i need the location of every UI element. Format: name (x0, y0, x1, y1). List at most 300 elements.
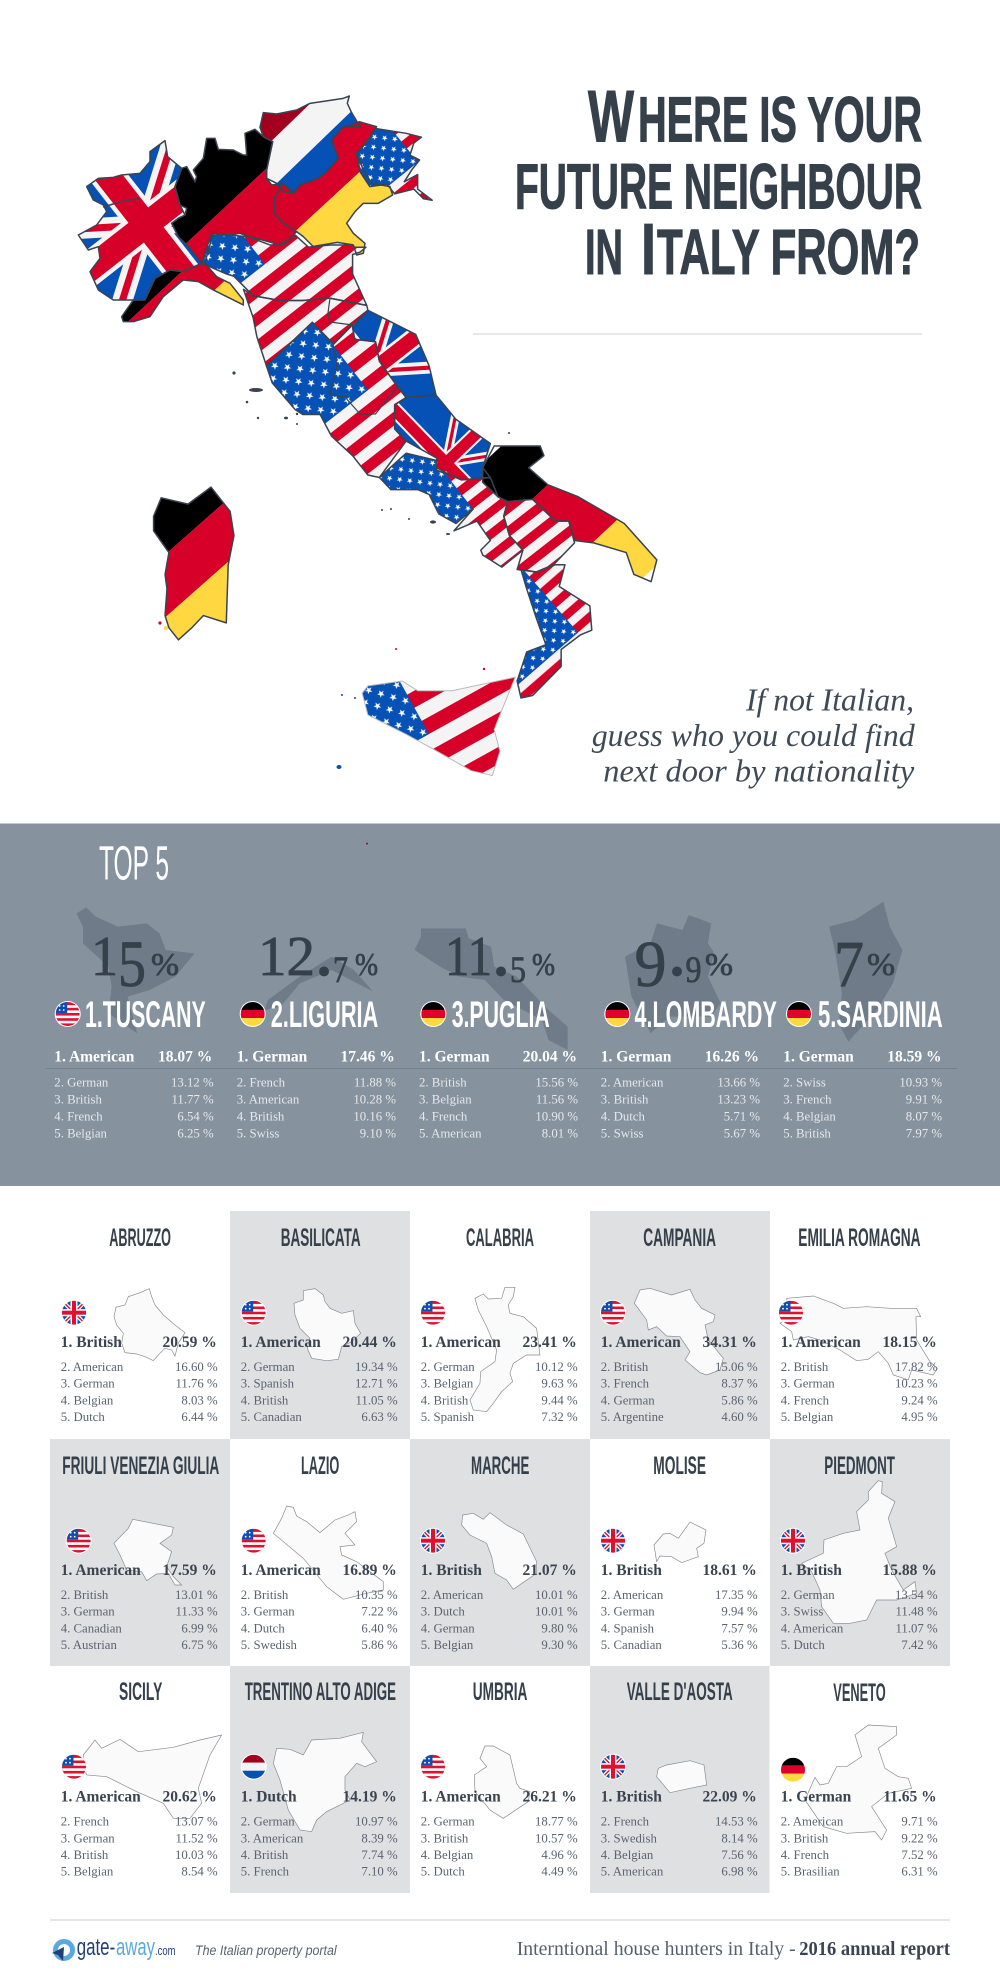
icon: US flag (241, 1300, 267, 1326)
stats: 10.97 % (355, 1815, 398, 1829)
stats: Lombardy: 3. British (601, 1093, 649, 1107)
region outline: Emilia Romagna (780, 1296, 937, 1380)
big percentages: . (670, 926, 684, 988)
stats: Sardinia: 3. French (783, 1093, 832, 1107)
stats: 1. American (421, 1789, 501, 1806)
stats: Tuscany: 11.77 % (172, 1093, 214, 1107)
stats: 4.60 % (721, 1410, 758, 1424)
stats: 17.82 % (895, 1360, 938, 1374)
stats: 7.52 % (901, 1848, 938, 1862)
stats: 2. German (421, 1815, 475, 1829)
stats: 5. French (241, 1865, 290, 1879)
icon: US flag (778, 1300, 804, 1326)
stats: 3. Belgian (421, 1377, 474, 1391)
title: W (588, 77, 634, 158)
stats: Liguria: 3. American (237, 1093, 300, 1107)
stats: 10.23 % (895, 1377, 938, 1391)
stats: 16.89 % (342, 1562, 397, 1579)
region: Friuli Venezia Giulia, US flag (358, 129, 429, 199)
stats: Puglia (419, 1049, 578, 1140)
stats: 10.01 % (535, 1588, 578, 1602)
heading: Basilicata: BASILICATA (281, 1224, 361, 1252)
footer report label: 2016 annual report (799, 1938, 950, 1960)
region outline: Lazio (273, 1506, 383, 1599)
stats: Sardinia: 8.07 % (906, 1110, 942, 1124)
region outline: Valle d'Aosta (657, 1761, 707, 1793)
stats: 19.34 % (355, 1360, 398, 1374)
stats: 15.06 % (715, 1360, 758, 1374)
region: Emilia Romagna, US flag (202, 236, 365, 304)
stats: 3. German (61, 1831, 115, 1845)
footer tagline: The Italian property portal (195, 1943, 338, 1958)
heading: Piedmont: PIEDMONT (824, 1452, 895, 1480)
icon: US flag (420, 1300, 446, 1326)
stats: 12.71 % (355, 1377, 398, 1391)
stats: 5.86 % (361, 1638, 398, 1652)
stats: 9.80 % (541, 1621, 578, 1635)
stats (601, 1334, 758, 1424)
stats: 3. Dutch (421, 1605, 465, 1619)
stats: Sardinia: 1. German (783, 1049, 854, 1066)
stats: 5.36 % (721, 1638, 758, 1652)
big percentages: 5 (118, 928, 146, 1001)
stats: Lombardy: 13.23 % (717, 1093, 760, 1107)
small islands (158, 371, 510, 769)
region: Piedmont and Valle d'Aosta, British flag (80, 142, 200, 300)
stats: 17.35 % (715, 1588, 758, 1602)
region: Campania, US flag (380, 454, 522, 566)
stats: 7.32 % (541, 1410, 578, 1424)
stats: 1. Dutch (241, 1789, 297, 1806)
stats (781, 1562, 938, 1652)
heading: Marche: MARCHE (471, 1452, 529, 1480)
stats: 18.77 % (535, 1815, 578, 1829)
stats: 1. American (601, 1334, 681, 1351)
stats: 9.71 % (901, 1815, 938, 1829)
stats: 5.86 % (721, 1393, 758, 1407)
stats: Sardinia: 7.97 % (906, 1126, 942, 1140)
stats: 2. American (421, 1588, 484, 1602)
stats: Liguria: 10.16 % (353, 1110, 396, 1124)
region outline: Friuli Venezia Giulia (114, 1519, 182, 1585)
icon: US flag (66, 1528, 92, 1554)
panel: Calabria (420, 1224, 578, 1424)
region: Lombardy, German flag (172, 130, 296, 262)
stats: Tuscany: 4. French (54, 1110, 103, 1124)
icon: British flag (420, 1528, 446, 1554)
icon: British flag (61, 1300, 87, 1326)
stats: 7.57 % (721, 1621, 758, 1635)
stats: 10.12 % (535, 1360, 578, 1374)
stats: 4. French (781, 1848, 830, 1862)
stats: 18.61 % (702, 1562, 757, 1579)
panel: Emilia Romagna (778, 1224, 938, 1424)
heading: Campania: CAMPANIA (643, 1224, 716, 1252)
stats: 34.31 % (702, 1334, 757, 1351)
icon: Dutch flag (241, 1754, 267, 1780)
stats: 17.59 % (162, 1562, 217, 1579)
stats: 13.01 % (175, 1588, 218, 1602)
region outline: Trentino Alto Adige (273, 1732, 377, 1832)
map region borders (78, 96, 657, 776)
stats: 15.88 % (882, 1562, 937, 1579)
stats: 3. British (781, 1831, 829, 1845)
region: Lazio and Umbria, US flag (267, 324, 406, 476)
stats (241, 1789, 398, 1879)
stats: 5. Swedish (241, 1638, 297, 1652)
stats: Lombardy: 13.66 % (717, 1076, 760, 1090)
stats: Puglia: 15.56 % (535, 1076, 578, 1090)
big percentages: . (494, 926, 508, 988)
stats: 5. Dutch (421, 1865, 465, 1879)
stats: 20.62 % (162, 1789, 217, 1806)
region names with flags (55, 994, 943, 1035)
stats: Lombardy: 4. Dutch (601, 1110, 645, 1124)
stats: 3. German (61, 1377, 115, 1391)
region names with flags: 2.LIGURIA (271, 994, 378, 1035)
region silhouettes (77, 902, 902, 1050)
stats: 2. French (601, 1815, 650, 1829)
stats (781, 1334, 938, 1424)
stats: Liguria: 9.10 % (360, 1126, 396, 1140)
big percentages: 9 (686, 950, 702, 991)
region: Veneto, German flag (274, 122, 392, 254)
stats: 13.07 % (175, 1815, 218, 1829)
stats: 11.65 % (883, 1789, 937, 1806)
stats: 9.24 % (901, 1393, 938, 1407)
stats: 4. Belgian (61, 1393, 114, 1407)
big percentages: % (151, 946, 179, 982)
region names with flags: 4.LOMBARDY (634, 994, 777, 1035)
stats: 2. American (781, 1815, 844, 1829)
stats (781, 1789, 938, 1879)
big percentages: 1 (91, 926, 118, 988)
stats: 5. Belgian (781, 1410, 834, 1424)
stats: 6.98 % (721, 1865, 758, 1879)
stats: 7.74 % (361, 1848, 398, 1862)
stats (61, 1562, 218, 1652)
stats: 2. British (781, 1360, 829, 1374)
region outline: Molise (654, 1522, 706, 1563)
stats: 22.09 % (702, 1789, 757, 1806)
stats: 6.75 % (181, 1638, 218, 1652)
stats: Tuscany: 6.54 % (177, 1110, 214, 1124)
stats: 3. Swiss (781, 1605, 823, 1619)
big percentages: % (532, 946, 555, 982)
stats (421, 1334, 578, 1424)
stats: 1. British (421, 1562, 482, 1579)
stats: 11.05 % (356, 1393, 398, 1407)
stats: 8.37 % (721, 1377, 758, 1391)
heading: Friuli Venezia Giulia: FRIULI VENEZIA GIULIA (62, 1452, 219, 1480)
icon: British flag (600, 1754, 626, 1780)
stats: 4. British (421, 1393, 469, 1407)
stats: 23.41 % (522, 1334, 577, 1351)
heading: Molise: MOLISE (653, 1452, 706, 1480)
stats: 2. American (61, 1360, 124, 1374)
stats: 9.22 % (901, 1831, 938, 1845)
stats: Puglia: 1. German (419, 1049, 490, 1066)
stats (61, 1789, 218, 1879)
icon: US flag (61, 1754, 87, 1780)
stats: 3. German (61, 1605, 115, 1619)
stats: 3. Swedish (601, 1831, 657, 1845)
stats: 6.44 % (181, 1410, 218, 1424)
stats: Tuscany: 3. British (54, 1093, 103, 1107)
stats: 4. American (781, 1621, 844, 1635)
big percentages: 7 (333, 950, 348, 991)
stats: 18.15 % (882, 1334, 937, 1351)
stats: Puglia: 2. British (419, 1076, 467, 1090)
stats: 4. British (241, 1848, 289, 1862)
stats: 7.56 % (721, 1848, 758, 1862)
title: IN (585, 216, 623, 288)
stats: 13.54 % (895, 1588, 938, 1602)
stats: Lombardy: 2. American (601, 1076, 664, 1090)
stats: Tuscany: 13.12 % (171, 1076, 214, 1090)
stats: 7.10 % (361, 1865, 398, 1879)
stats: Puglia: 10.90 % (535, 1110, 578, 1124)
icon: German flag (780, 1757, 806, 1783)
stats: 11.76 % (176, 1377, 218, 1391)
subtitle: next door by nationality (603, 753, 915, 789)
big percentages: % (705, 946, 733, 982)
stats: Liguria: 1. German (237, 1049, 308, 1066)
stats: 7.22 % (361, 1605, 398, 1619)
big percentages: . (317, 926, 331, 988)
stats: 10.57 % (535, 1831, 578, 1845)
region: Calabria, US flag (518, 566, 591, 698)
stats: 5. Canadian (601, 1638, 662, 1652)
region outline: Veneto (805, 1725, 912, 1840)
panel: Friuli Venezia Giulia (50, 1439, 230, 1666)
stats: 11.07 % (896, 1621, 938, 1635)
subtitle: guess who you could find (592, 717, 916, 753)
panel: Sicily (61, 1678, 222, 1879)
stats: 4. Canadian (61, 1621, 122, 1635)
stats: Tuscany: 18.07 % (158, 1049, 212, 1066)
stats: Liguria: 5. Swiss (237, 1126, 279, 1140)
panel: Basilicata (230, 1211, 410, 1439)
footer logo: .com (155, 1943, 176, 1958)
stats: 4. Spanish (601, 1621, 655, 1635)
region names with flags: 3.PUGLIA (452, 994, 550, 1035)
region outline: Campania (634, 1288, 723, 1375)
footer report label (517, 1938, 950, 1960)
stats: 8.39 % (361, 1831, 398, 1845)
stats: 6.99 % (181, 1621, 218, 1635)
stats (61, 1334, 218, 1424)
region outline: Piedmont (802, 1481, 917, 1623)
stats: 1. German (781, 1789, 852, 1806)
region: Puglia, German flag (483, 446, 656, 578)
stats (421, 1562, 578, 1652)
stats: Puglia: 4. French (419, 1110, 468, 1124)
stats: Liguria: 2. French (237, 1076, 286, 1090)
stats: 2. German (781, 1588, 835, 1602)
big percentages: 12 (258, 926, 315, 988)
stats: Lombardy: 5. Swiss (601, 1126, 643, 1140)
stats: 4. British (61, 1848, 109, 1862)
heading: Calabria: CALABRIA (466, 1224, 534, 1252)
stats (241, 1334, 398, 1424)
stats: 3. German (241, 1605, 295, 1619)
stats: 8.54 % (181, 1865, 218, 1879)
stats: 2. British (601, 1360, 649, 1374)
stats: Lombardy (601, 1049, 760, 1140)
panel: Umbria (420, 1678, 578, 1879)
stats: 4. Belgian (421, 1848, 474, 1862)
stats: 5. Canadian (241, 1410, 302, 1424)
region outline: Umbria (474, 1746, 530, 1818)
panel: Piedmont (770, 1439, 950, 1666)
stats: 3. American (241, 1831, 304, 1845)
stats: 4. German (421, 1621, 475, 1635)
stats: 4. German (601, 1393, 655, 1407)
icon: British flag (780, 1528, 806, 1554)
region: Trentino Alto Adige, Dutch flag (260, 98, 356, 192)
stats: Liguria: 4. British (237, 1110, 285, 1124)
stats: Tuscany: 1. American (54, 1049, 135, 1066)
stats: Liguria: 17.46 % (340, 1049, 395, 1066)
stats: 11.48 % (896, 1605, 938, 1619)
stats: 7.42 % (901, 1638, 938, 1652)
stats: 3. Spanish (241, 1377, 295, 1391)
stats: 5. Dutch (61, 1410, 105, 1424)
stats: 5. Spanish (421, 1410, 475, 1424)
stats: 11.33 % (176, 1605, 218, 1619)
stats: 1. British (601, 1789, 662, 1806)
stats: Sardinia: 2. Swiss (783, 1076, 826, 1090)
stats: Lombardy: 5.71 % (724, 1110, 760, 1124)
region: Tuscany, US flag stripes (245, 292, 367, 364)
stats: Tuscany: 2. German (54, 1076, 109, 1090)
panel: Trentino Alto Adige (230, 1666, 410, 1893)
icon: British flag (600, 1528, 626, 1554)
stats: 5. Austrian (61, 1638, 117, 1652)
stats: 6.63 % (361, 1410, 398, 1424)
subtitle: If not Italian, (745, 682, 914, 718)
stats: 3. British (421, 1831, 469, 1845)
heading: Valle d'Aosta: VALLE D'AOSTA (627, 1678, 733, 1706)
title: I (641, 210, 656, 290)
stats: 2. German (241, 1360, 295, 1374)
title (515, 77, 922, 290)
footer logo (52, 1934, 176, 1961)
subtitle (592, 682, 916, 789)
stats: Lombardy: 1. German (601, 1049, 672, 1066)
stats: Puglia: 5. American (419, 1126, 482, 1140)
stats: 20.59 % (162, 1334, 217, 1351)
stats: 10.03 % (175, 1848, 218, 1862)
heading: top 5: TOP 5 (99, 838, 169, 890)
region outline: Abruzzo (114, 1289, 185, 1361)
stats: 4.49 % (541, 1865, 578, 1879)
footer logo: gate- (77, 1934, 115, 1961)
stats: Sardinia: 10.93 % (899, 1076, 942, 1090)
region: Abruzzo and Molise, British flag (396, 396, 490, 479)
stats: 2. American (601, 1588, 664, 1602)
stats: Puglia: 8.01 % (542, 1126, 578, 1140)
stats: 2. German (421, 1360, 475, 1374)
stats: Tuscany: 5. Belgian (54, 1126, 108, 1140)
stats: 9.44 % (541, 1393, 578, 1407)
stats: 10.35 % (355, 1588, 398, 1602)
stats: 5. Brasilian (781, 1865, 840, 1879)
region: Liguria, German flag (122, 264, 243, 321)
stats: Sardinia: 9.91 % (906, 1093, 942, 1107)
stats: 5. American (601, 1865, 664, 1879)
stats: 1. British (61, 1334, 122, 1351)
stats: Sardinia (783, 1049, 942, 1140)
stats: 21.07 % (522, 1562, 577, 1579)
stats: 4. Belgian (601, 1848, 654, 1862)
region names with flags: 1.TUSCANY (85, 994, 206, 1035)
footer logo: away (116, 1934, 155, 1961)
icon: US flag (420, 1754, 446, 1780)
stats: 1. American (61, 1562, 141, 1579)
region: Basilicata, US flag stripes (504, 500, 574, 571)
region outline: Basilicata (294, 1289, 361, 1361)
stats: 1. British (781, 1562, 842, 1579)
stats: 5. Belgian (61, 1865, 114, 1879)
stats: 9.30 % (541, 1638, 578, 1652)
heading: Trentino Alto Adige: TRENTINO ALTO ADIGE (245, 1678, 396, 1706)
stats: Tuscany (54, 1049, 214, 1140)
big percentages: 11 (445, 926, 492, 988)
region: Sicily, US flag (362, 678, 514, 774)
region outline: Calabria (470, 1287, 540, 1412)
heading: Sicily: SICILY (119, 1678, 162, 1706)
panel: Veneto (780, 1679, 938, 1879)
stats: 4.95 % (901, 1410, 938, 1424)
stats: 4. British (241, 1393, 289, 1407)
big percentages: 7 (834, 928, 864, 1001)
heading: Veneto: VENETO (833, 1679, 886, 1707)
map of Italy filled with flags (0, 0, 748, 884)
stats: Liguria: 10.28 % (353, 1093, 396, 1107)
icon: US flag (600, 1300, 626, 1326)
big percentages: % (867, 946, 895, 982)
stats: 9.94 % (721, 1605, 758, 1619)
stats: 11.52 % (176, 1831, 218, 1845)
stats: 1. American (421, 1334, 501, 1351)
stats: 26.21 % (522, 1789, 577, 1806)
stats: 1. American (781, 1334, 861, 1351)
stats: 8.14 % (721, 1831, 758, 1845)
panel: Valle d'Aosta (590, 1666, 770, 1893)
heading: Umbria: UMBRIA (473, 1678, 527, 1706)
stats: 2. British (61, 1588, 109, 1602)
stats: Lombardy: 16.26 % (705, 1049, 759, 1066)
stats: Lombardy: 5.67 % (724, 1126, 760, 1140)
stats: 4. Dutch (241, 1621, 285, 1635)
stats: 3. German (601, 1605, 655, 1619)
stats: 1. American (61, 1789, 141, 1806)
stats: 16.60 % (175, 1360, 218, 1374)
stats: Sardinia: 18.59 % (887, 1049, 942, 1066)
stats (601, 1789, 758, 1879)
panel: Campania (590, 1211, 770, 1439)
stats: Tuscany: 6.25 % (177, 1126, 214, 1140)
stats: Puglia: 11.56 % (536, 1093, 578, 1107)
panel: Marche (410, 1439, 590, 1666)
stats: 6.31 % (901, 1865, 938, 1879)
heading: Abruzzo: ABRUZZO (109, 1224, 171, 1252)
stats: 3. German (781, 1377, 835, 1391)
stats: Sardinia: 5. British (783, 1126, 831, 1140)
big percentages: 9 (634, 928, 666, 1001)
